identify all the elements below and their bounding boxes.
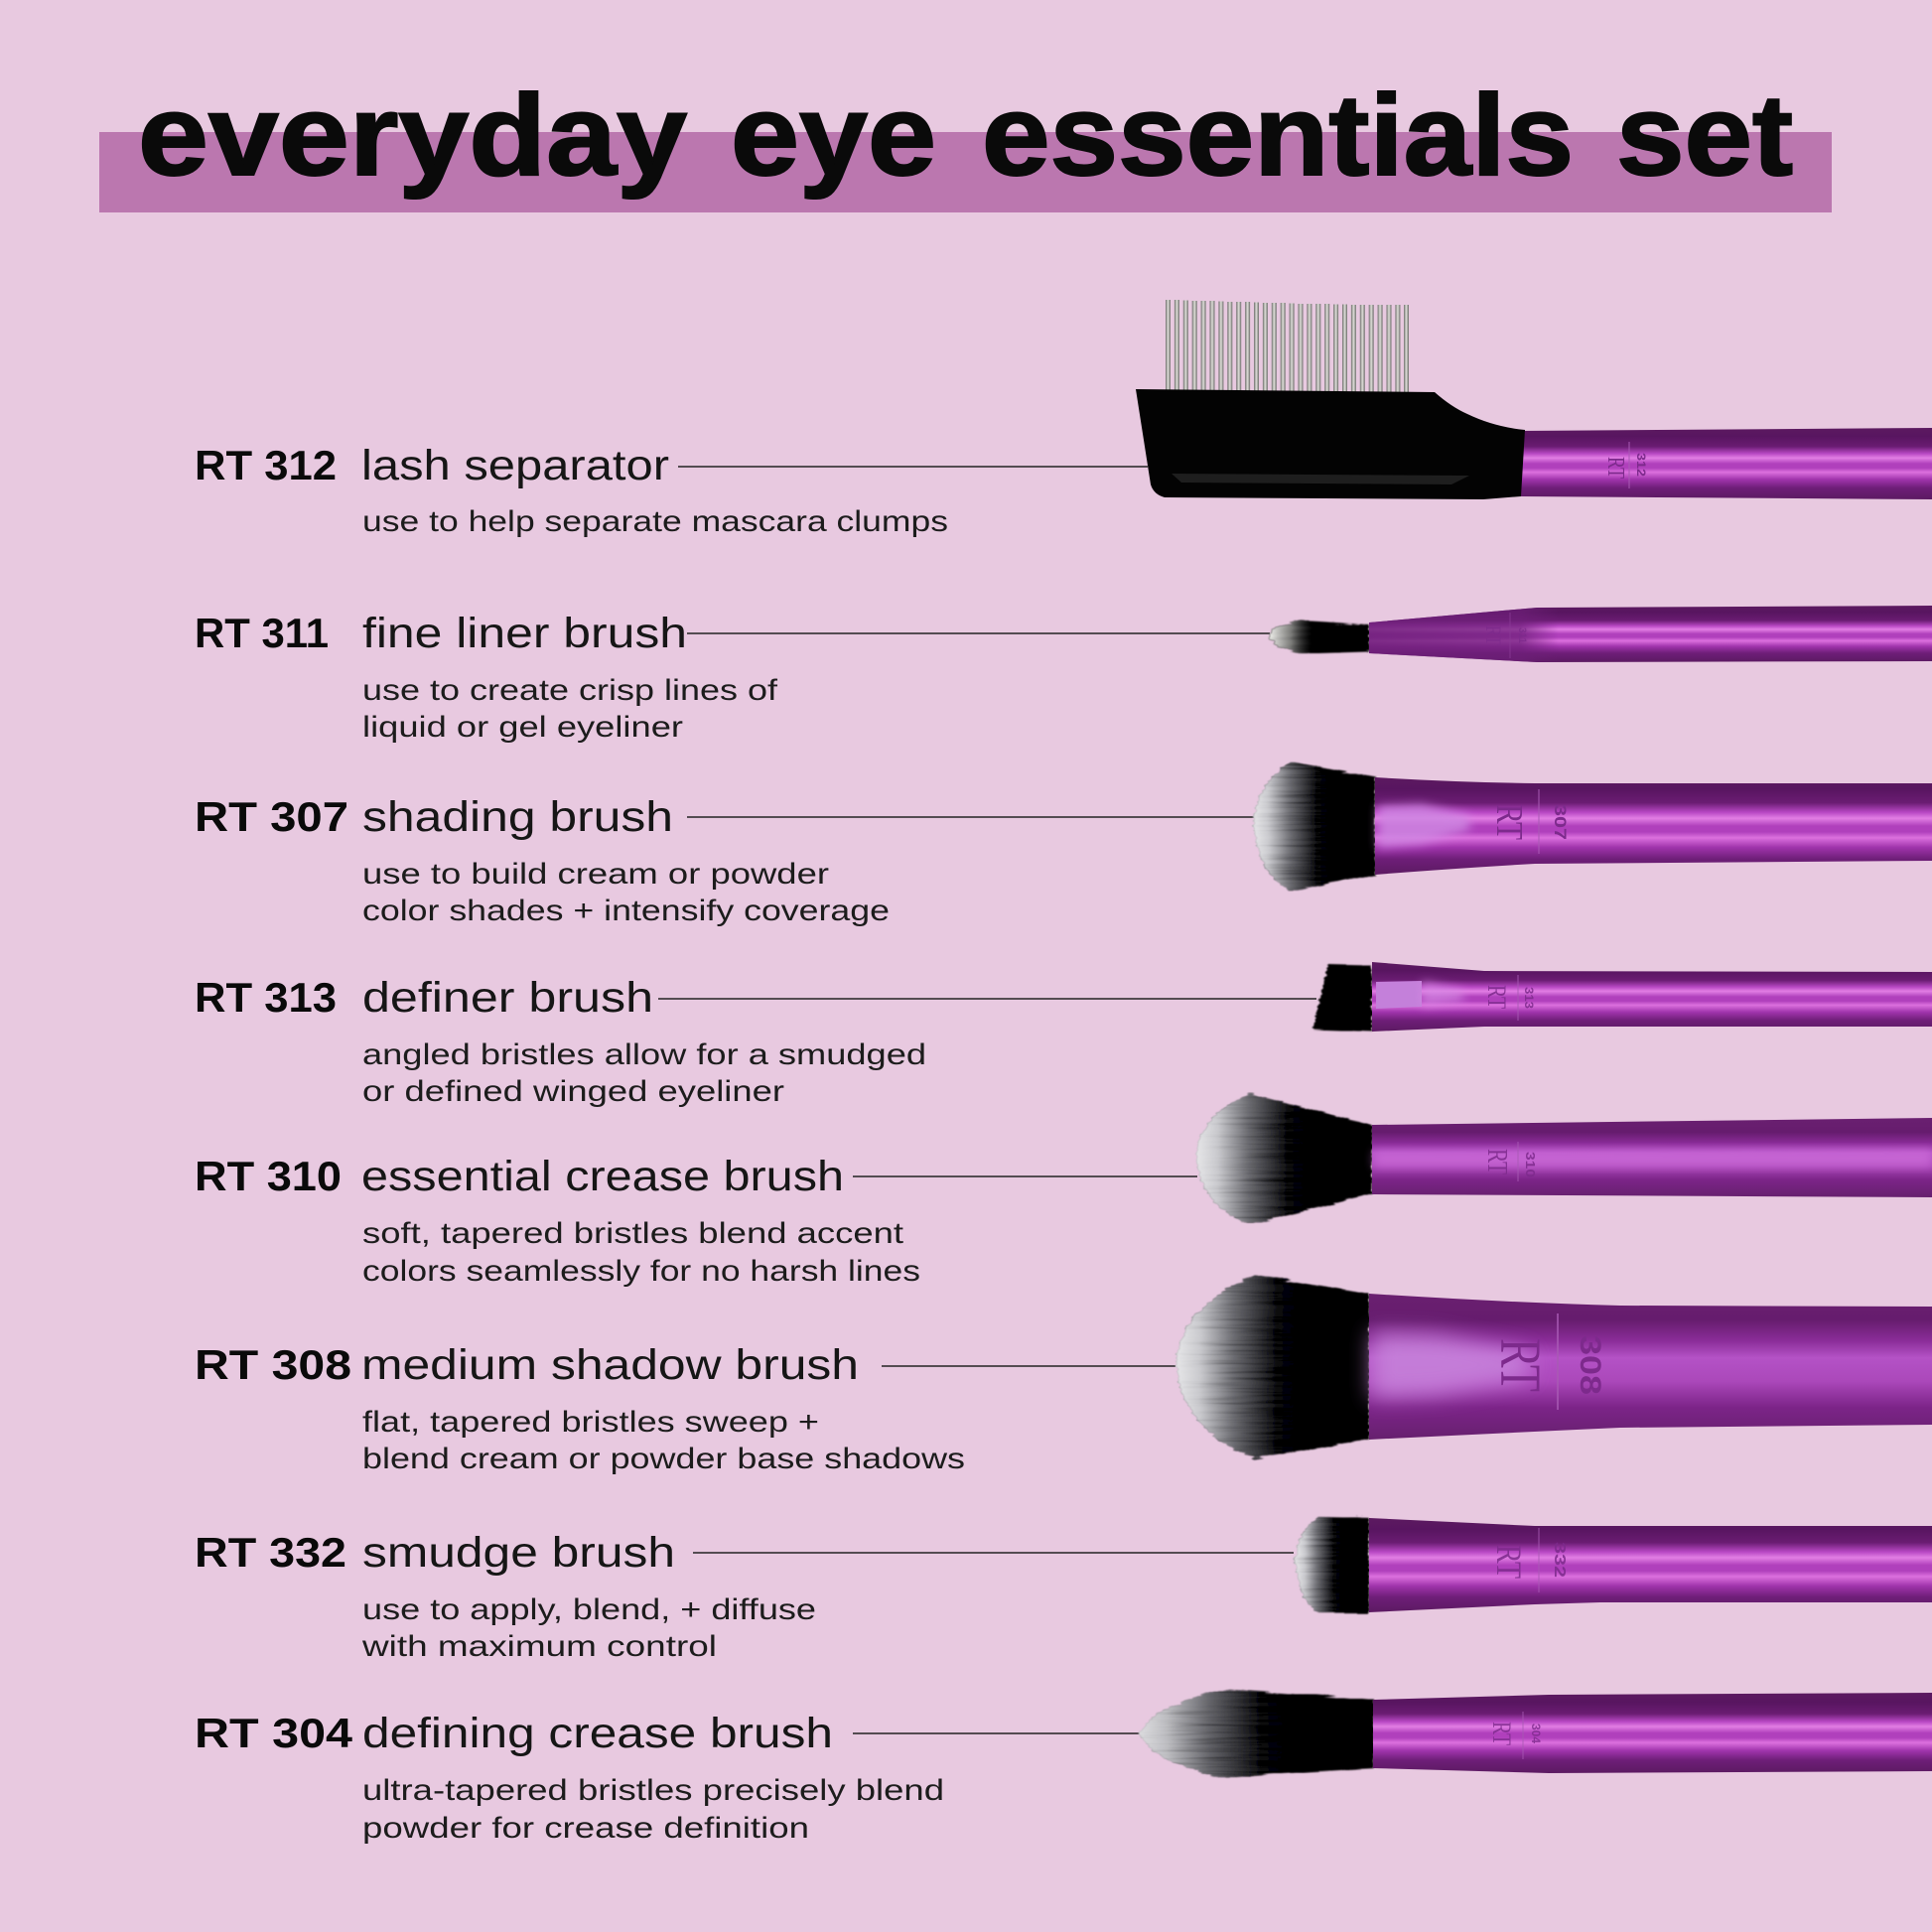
- description: with maximum control: [361, 1630, 717, 1663]
- comb teeth: [1166, 300, 1409, 396]
- item: RT 308 medium shadow brush: [195, 1341, 965, 1475]
- description: use to create crisp lines of: [362, 674, 778, 707]
- handle marks: 313: [1522, 987, 1536, 1009]
- bristles: [1176, 1275, 1369, 1458]
- brush: definer: [1312, 962, 1932, 1032]
- bristles: [1312, 964, 1372, 1032]
- item: RT 312 lash separator: [195, 442, 948, 538]
- bristle tips: [1176, 1275, 1369, 1458]
- description: flat, tapered bristles sweep +: [362, 1406, 819, 1439]
- title: set: [1616, 70, 1793, 200]
- handle marks: [1482, 975, 1536, 1021]
- ferrule highlight: [1376, 981, 1422, 1009]
- description: [362, 858, 890, 927]
- description: [362, 1038, 926, 1108]
- handle highlight: [1374, 1150, 1932, 1167]
- name: lash separator: [361, 442, 669, 489]
- leader line: [687, 632, 1270, 634]
- bristle tips: [1296, 1517, 1369, 1612]
- bristles: [1139, 1690, 1374, 1777]
- description: [362, 1406, 965, 1475]
- description: use to help separate mascara clumps: [362, 505, 948, 538]
- code: RT 332: [195, 1529, 346, 1576]
- description: [362, 674, 778, 744]
- handle marks: RT: [1602, 457, 1628, 479]
- description: or defined winged eyeliner: [362, 1075, 784, 1108]
- description: angled bristles allow for a smudged: [362, 1038, 926, 1071]
- description: color shades + intensify coverage: [362, 895, 890, 927]
- bristle tips: [1196, 1094, 1372, 1224]
- handle marks: [1488, 789, 1570, 854]
- handle marks: [1481, 1142, 1538, 1181]
- handle marks: RT: [1489, 1545, 1529, 1579]
- item: RT 304 defining crease brush: [195, 1710, 944, 1845]
- brush: smudge: [1296, 1517, 1932, 1612]
- bristles: [1269, 621, 1369, 653]
- handle: [1369, 1518, 1932, 1612]
- code: RT 310: [195, 1153, 342, 1199]
- handle marks: [1488, 1313, 1606, 1410]
- brush: medium shadow: [1176, 1275, 1932, 1458]
- ferrule shade: [1369, 608, 1559, 662]
- handle marks: 304: [1529, 1724, 1543, 1743]
- handle marks: RT: [1482, 985, 1511, 1009]
- description: [362, 1217, 920, 1288]
- leader line: [687, 816, 1254, 818]
- item: RT 310 essential crease brush: [195, 1153, 920, 1288]
- item: RT 313 definer brush: [195, 974, 926, 1108]
- brush: essential crease: [1196, 1094, 1932, 1224]
- handle marks: 332: [1551, 1542, 1568, 1578]
- handle: [1375, 777, 1932, 875]
- name: fine liner brush: [362, 610, 687, 657]
- brush: defining crease: [1139, 1690, 1932, 1777]
- brush: fine liner: [1269, 606, 1932, 662]
- code: RT 307: [195, 793, 348, 840]
- leader line: [853, 1175, 1197, 1177]
- name: definer brush: [362, 974, 653, 1022]
- handle marks: RT: [1488, 1338, 1553, 1392]
- name: defining crease brush: [362, 1710, 833, 1757]
- code: RT 313: [195, 974, 337, 1021]
- handle marks: RT: [1488, 804, 1530, 840]
- bristle tips: [1139, 1690, 1374, 1777]
- handle marks: RT: [1487, 1722, 1516, 1745]
- handle marks: 307: [1551, 804, 1570, 840]
- name: medium shadow brush: [361, 1341, 859, 1389]
- description: colors seamlessly for no harsh lines: [362, 1255, 920, 1288]
- handle: [1369, 1294, 1932, 1440]
- handle marks: [1487, 1712, 1543, 1759]
- handle marks: 308: [1574, 1335, 1606, 1395]
- description: soft, tapered bristles blend accent: [362, 1217, 904, 1250]
- description: ultra-tapered bristles precisely blend: [362, 1774, 944, 1807]
- leader line: [882, 1365, 1175, 1367]
- bristle tips: [1269, 621, 1369, 653]
- item: RT 332 smudge brush: [195, 1529, 816, 1663]
- brush: shading: [1254, 762, 1932, 891]
- bristles: [1296, 1517, 1369, 1612]
- handle marks: 311: [1516, 627, 1528, 643]
- description: powder for crease definition: [362, 1812, 809, 1845]
- code: RT 312: [195, 442, 337, 488]
- code: RT 308: [195, 1341, 351, 1388]
- item: RT 307 shading brush: [195, 793, 890, 927]
- description: use to build cream or powder: [362, 858, 829, 891]
- handle: [1369, 606, 1932, 662]
- title: eye: [731, 70, 936, 200]
- handle: [1520, 428, 1932, 499]
- bristle tips: [1254, 762, 1375, 891]
- description: [361, 1593, 816, 1663]
- leader line: [853, 1732, 1140, 1734]
- description: use to apply, blend, + diffuse: [362, 1593, 816, 1626]
- handle marks: 312: [1634, 453, 1648, 477]
- handle marks: [1481, 613, 1528, 658]
- handle: [1372, 962, 1932, 1032]
- name: essential crease brush: [361, 1153, 844, 1200]
- leader line: [693, 1552, 1294, 1554]
- black head: [1136, 389, 1525, 499]
- handle marks: [1602, 442, 1648, 488]
- ferrule highlight: [1372, 1332, 1529, 1398]
- title: everyday: [138, 70, 687, 200]
- brush: lash separator: [1136, 300, 1932, 499]
- description: blend cream or powder base shadows: [362, 1443, 965, 1475]
- code: RT 304: [195, 1710, 353, 1756]
- handle marks: 310: [1523, 1152, 1538, 1177]
- leader line: [678, 466, 1148, 468]
- handle marks: RT: [1481, 625, 1506, 645]
- title: [138, 70, 1793, 200]
- description: liquid or gel eyeliner: [362, 711, 683, 744]
- description: [362, 1774, 944, 1845]
- handle marks: RT: [1481, 1149, 1512, 1174]
- handle marks: [1489, 1528, 1568, 1592]
- code: RT 311: [195, 610, 329, 656]
- handle: [1372, 1118, 1932, 1197]
- bristles: [1254, 762, 1375, 891]
- handle: [1373, 1693, 1932, 1773]
- ferrule highlight: [1378, 804, 1469, 848]
- leader line: [658, 998, 1316, 1000]
- title: essentials: [982, 70, 1574, 200]
- bristles: [1196, 1094, 1372, 1224]
- name: shading brush: [362, 793, 673, 841]
- name: smudge brush: [362, 1529, 675, 1577]
- item: RT 311 fine liner brush: [195, 610, 778, 744]
- title band: [99, 132, 1832, 212]
